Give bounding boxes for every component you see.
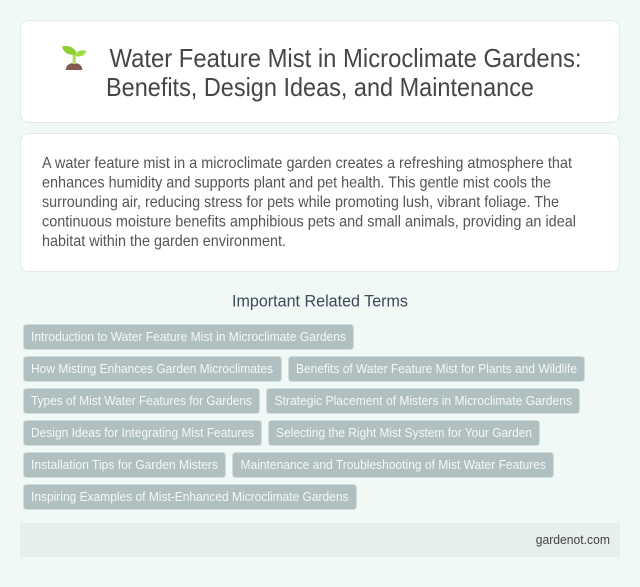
tag: inspiring examples: Inspiring Examples of Mist-Enhanced Microclimate Gardens xyxy=(31,490,348,504)
tag: introduction xyxy=(24,324,354,350)
tag: strategic placement xyxy=(266,388,580,414)
tag: introduction: Introduction to Water Feature Mist in Microclimate Gardens xyxy=(31,330,346,344)
heading: title xyxy=(106,45,582,102)
text block: description: continuous moisture benefits amphibious pets and small animals, providing an ideal xyxy=(42,214,576,230)
tag: how misting enhances xyxy=(24,356,282,382)
tag: installation: Installation Tips for Garden Misters xyxy=(31,458,218,472)
heading: title: Benefits, Design Ideas, and Maintenance xyxy=(106,74,534,102)
tag: types: Types of Mist Water Features for Gardens xyxy=(31,394,252,408)
tag: maintenance: Maintenance and Troubleshooting of Mist Water Features xyxy=(240,458,546,472)
heading: title: Water Feature Mist in Microclimate Gardens: xyxy=(110,45,582,73)
heading: important related terms: Important Related Terms xyxy=(232,292,408,310)
tag: benefits: Benefits of Water Feature Mist for Plants and Wildlife xyxy=(296,362,577,376)
panel: description card xyxy=(20,134,620,272)
footer xyxy=(20,523,620,557)
text block: description: enhances humidity and supports plant and pet health. This gentle mist cools the xyxy=(42,174,551,192)
text block: description xyxy=(42,155,576,250)
text block: description: surrounding air, reducing stress for pets while promoting lush, vibrant foliage. The xyxy=(42,194,559,211)
panel: related term tags xyxy=(24,324,584,510)
text block: description: A water feature mist in a microclimate garden creates a refreshing atmosphere that xyxy=(42,155,573,172)
tag: benefits xyxy=(288,356,584,382)
tag: how misting enhances: How Misting Enhances Garden Microclimates xyxy=(31,362,273,376)
panel: title card xyxy=(20,20,620,122)
tag: maintenance xyxy=(232,452,554,478)
tag: installation xyxy=(24,452,226,478)
tag: selecting system xyxy=(268,420,540,446)
tag: types xyxy=(24,388,260,414)
tag: design ideas: Design Ideas for Integrating Mist Features xyxy=(31,426,254,440)
tag: selecting system: Selecting the Right Mist System for Your Garden xyxy=(276,426,532,440)
tag: strategic placement: Strategic Placement of Misters in Microclimate Gardens xyxy=(274,394,572,408)
footer: gardenot.com xyxy=(536,533,610,547)
tag: inspiring examples xyxy=(24,484,356,510)
text block: description: habitat within the garden environment. xyxy=(42,233,286,250)
tag: design ideas xyxy=(24,420,262,446)
icon: seedling xyxy=(62,46,86,70)
